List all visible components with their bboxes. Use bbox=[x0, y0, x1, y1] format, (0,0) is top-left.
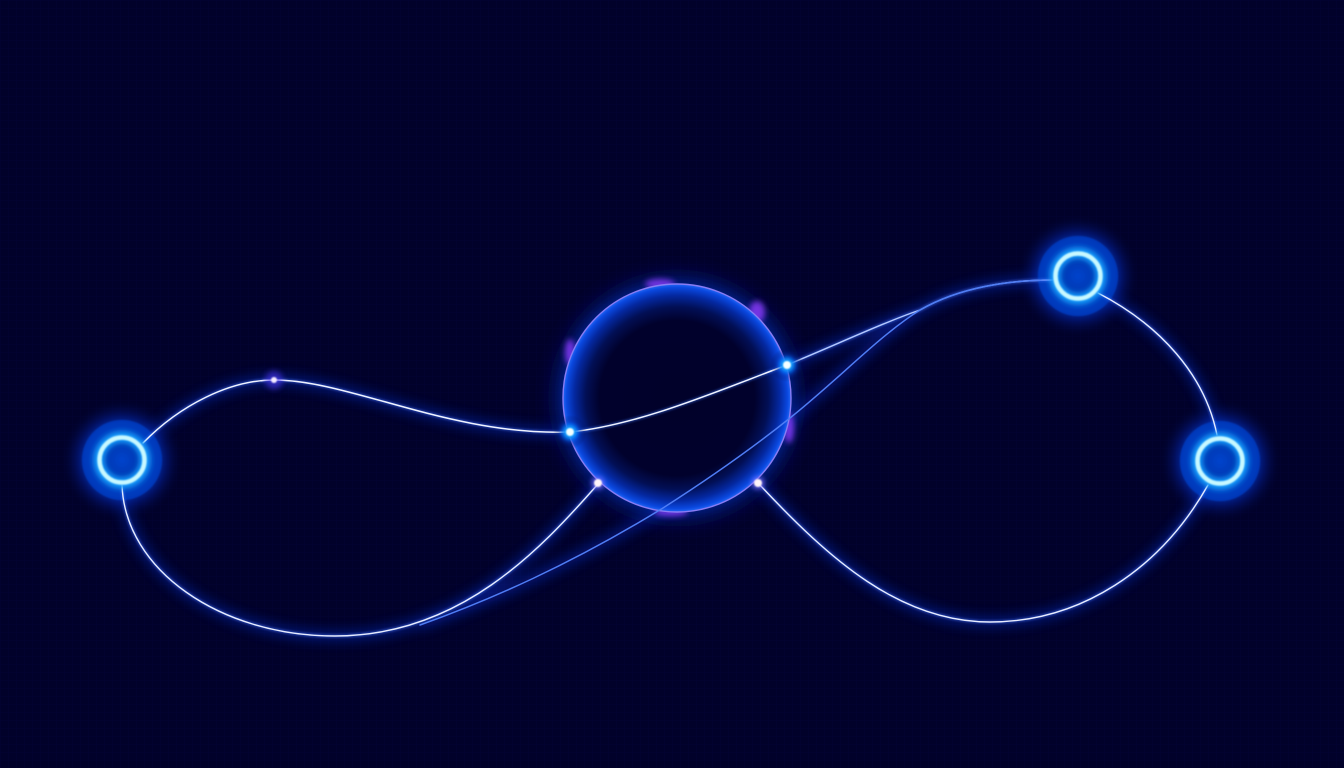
node halo: top right bbox=[1016, 214, 1140, 338]
sphere outer glow bbox=[537, 258, 817, 538]
curve: lower left loop bbox=[122, 484, 598, 636]
node: right ring bbox=[1197, 438, 1243, 484]
curve: top right to right node bbox=[1098, 293, 1217, 435]
central sphere bbox=[537, 258, 817, 538]
node halo: right bbox=[1158, 399, 1282, 523]
line glow bbox=[122, 280, 1217, 636]
point: sphere lower right dot bbox=[751, 476, 765, 490]
point: sphere right cyan dot bbox=[770, 348, 804, 382]
point: upper left violet dot bbox=[265, 371, 283, 389]
point: sphere left cyan dot bbox=[553, 415, 587, 449]
node halo: left bbox=[60, 398, 184, 522]
sphere rim bbox=[563, 284, 791, 512]
point: sphere lower left dot bbox=[591, 476, 605, 490]
curve: lower right loop bbox=[759, 484, 1208, 622]
node: top right ring bbox=[1055, 253, 1101, 299]
curve: blue diagonal bbox=[420, 280, 1053, 625]
node: left ring bbox=[99, 437, 145, 483]
violet flares on the rim bbox=[565, 279, 794, 516]
curve: upper left through sphere to top right bbox=[143, 280, 1053, 443]
sphere body bbox=[563, 284, 791, 512]
